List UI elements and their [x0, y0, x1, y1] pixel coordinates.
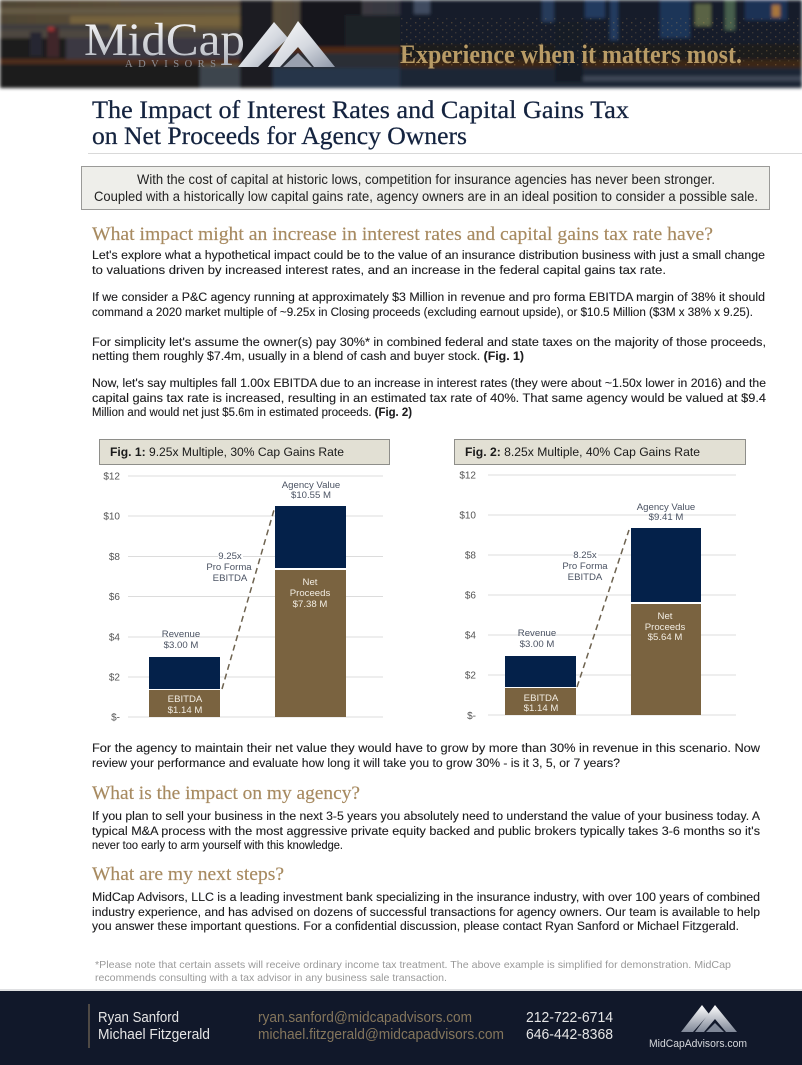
title: The Impact of Interest Rates and Capital Gains Tax [92, 97, 630, 124]
y axis labels: $8 [109, 552, 120, 563]
multiple label: 9.25x [218, 551, 242, 562]
figure 2 heading: Fig. 2: 8.25x Multiple, 40% Cap Gains Rate [465, 445, 700, 459]
logo: mountain mark [238, 21, 335, 67]
agency value bar: $9.41 M [649, 512, 683, 523]
footer [0, 989, 802, 1065]
y axis labels: $2 [465, 670, 476, 682]
figure 1 heading [100, 440, 390, 464]
paragraph: about MidCap: you answer these important questions. For a confidential discussion, please contact Ryan Sanford or Michael Fitzgerald. [92, 919, 739, 933]
agency value bar: $10.55 M [291, 490, 331, 501]
figure 2 heading [454, 440, 746, 464]
footer phones [526, 1010, 613, 1043]
paragraph: multiples fall: capital gains tax rate is increased, resulting in an estimated tax rate of 40%. That same agency would be valued at $9.4 [92, 391, 766, 405]
footnote: *Please note that certain assets will receive ordinary income tax treatment. The above example is simplified for demonstration. MidCap [95, 960, 731, 971]
footer logo mark [681, 1005, 737, 1032]
revenue bar: Revenue [518, 628, 556, 639]
y axis labels [103, 472, 120, 724]
y axis labels [459, 470, 476, 722]
footer emails: ryan.sanford@midcapadvisors.com [258, 1010, 472, 1026]
agency value bar: Proceeds [290, 588, 330, 599]
revenue bar: $3.00 M [164, 640, 198, 651]
paragraph: about MidCap: MidCap Advisors, LLC is a leading investment bank specializing in the insurance industry, with over 100 years of combined [92, 890, 760, 904]
title [92, 97, 630, 150]
paragraph: owner taxes [92, 335, 766, 363]
paragraph: hypothetical impact: to valuations driven by increased interest rates, and an increase in the federal capital gains tax rate. [92, 263, 666, 277]
y axis labels: $12 [103, 472, 120, 482]
heading: impact on my agency: What is the impact on my agency? [92, 783, 360, 804]
agency value bar: Net [303, 577, 318, 588]
agency value bar: Proceeds [645, 622, 685, 633]
multiple arrow [577, 530, 629, 687]
agency value bar: $5.64 M [648, 632, 682, 643]
paragraph: maintain net value: For the agency to maintain their net value they would have to grow by more than 30% in revenue in this scenario. Now [92, 741, 760, 755]
multiple label: EBITDA [213, 573, 248, 584]
paragraph: multiples fall [92, 376, 766, 419]
footer emails [258, 1010, 504, 1043]
footer emails: michael.fitzgerald@midcapadvisors.com [258, 1027, 504, 1043]
paragraph: about MidCap [92, 890, 760, 933]
panel: figure 2 chart [454, 440, 746, 722]
revenue bar: EBITDA [168, 694, 203, 705]
footer phones: 646-442-8368 [526, 1027, 613, 1043]
logo: MidCap Advisors: ADVISORS [125, 59, 216, 70]
revenue bar: $1.14 M [524, 703, 558, 714]
paragraph: maintain net value: review your performance and evaluate how long it will take you to grow 30% - is it 3, 5, or 7 years? [92, 756, 620, 770]
paragraph: multiples fall: Million and would net just $5.6m in estimated proceeds. (Fig. 2) [92, 405, 412, 419]
footnote: recommends consulting with a tax advisor in any business sale transaction. [95, 973, 447, 984]
revenue bar: EBITDA [524, 693, 559, 704]
agency value bar [275, 480, 346, 717]
agency value bar [631, 502, 701, 715]
city lights [400, 18, 802, 66]
paragraph: value today: If you plan to sell your business in the next 3-5 years you absolutely need to understand the value of your business today. A [92, 809, 761, 823]
agency value bar: Agency Value [282, 480, 340, 491]
footer website: MidCapAdvisors.com [649, 1038, 747, 1050]
paragraph: P&C agency example: If we consider a P&C agency running at approximately $3 Million in revenue and pro forma EBITDA margin of 38% it should [92, 290, 765, 304]
paragraph: about MidCap: industry experience, and has advised on dozens of successful transactions for agency owners. Our team is available to help [92, 905, 760, 919]
y axis labels: $12 [459, 470, 476, 482]
revenue bar [505, 628, 576, 715]
multiple label [206, 551, 252, 584]
y axis labels: $4 [465, 630, 476, 642]
paragraph: value today [92, 809, 761, 852]
multiple label: Pro Forma [206, 562, 252, 573]
paragraph: P&C agency example: command a 2020 market multiple of ~9.25x in Closing proceeds (excluding earnout upside), or $10.5 Million ($3M x 38% x 9.25). [92, 305, 753, 319]
y axis labels: $6 [109, 592, 120, 603]
paragraph: owner taxes: netting them roughly $7.4m, usually in a blend of cash and buyer stock. (Fig. 1) [92, 349, 524, 363]
title: on Net Proceeds for Agency Owners [92, 123, 467, 150]
panel: figure 1 chart [100, 440, 390, 724]
multiple arrow [222, 510, 274, 689]
revenue bar [149, 629, 220, 717]
footnote [95, 960, 731, 984]
multiple label: 8.25x [573, 550, 597, 561]
agency value bar: $7.38 M [293, 599, 327, 610]
y axis labels: $- [467, 711, 476, 722]
agency value bar: Net [658, 611, 673, 622]
footer phones: 212-722-6714 [526, 1010, 613, 1026]
paragraph: value today: never too early to arm yourself with this knowledge. [92, 838, 343, 852]
intro callout box: With the cost of capital at historic lows, competition for insurance agencies has never been stronger. [137, 172, 715, 187]
revenue bar: $1.14 M [168, 705, 202, 716]
paragraph: hypothetical impact [92, 248, 765, 277]
paragraph: owner taxes: For simplicity let's assume the owner(s) pay 30%* in combined federal and state taxes on the majority of those proceeds, [92, 335, 766, 349]
paragraph: value today: typical M&A process with the most aggressive private equity backed and public brokers typically takes 3-6 months so it's [92, 824, 760, 838]
banner skyline photo [0, 0, 802, 88]
y axis labels: $2 [109, 672, 120, 684]
y axis labels: $4 [109, 632, 120, 644]
multiple label [562, 550, 608, 583]
y axis labels: $6 [465, 590, 476, 602]
agency value bar: Agency Value [637, 502, 695, 513]
y axis labels: $10 [459, 510, 476, 522]
y axis labels: $8 [465, 550, 476, 562]
multiple label: EBITDA [568, 572, 603, 583]
paragraph: P&C agency example [92, 290, 765, 319]
y axis labels: $10 [103, 512, 120, 522]
footer names: Michael Fitzgerald [98, 1027, 210, 1043]
figure 1 heading: Fig. 1: 9.25x Multiple, 30% Cap Gains Rate [110, 445, 344, 459]
multiple label: Pro Forma [562, 561, 608, 572]
paragraph: hypothetical impact: Let's explore what a hypothetical impact could be to the value of an insurance distribution business with just a small change [92, 248, 765, 262]
revenue bar: Revenue [162, 629, 200, 640]
tagline: Experience when it matters most. [400, 40, 742, 69]
logo: MidCap Advisors: MidCap [84, 14, 245, 66]
footer names: Ryan Sanford [98, 1010, 179, 1026]
paragraph: maintain net value [92, 741, 760, 770]
header banner [0, 0, 802, 88]
heading: next steps: What are my next steps? [92, 864, 284, 885]
paragraph: multiples fall: Now, let's say multiples fall 1.00x EBITDA due to an increase in interest rates (they were about ~1.50x lower in 2016) and the [92, 376, 766, 390]
logo: MidCap Advisors [84, 14, 335, 70]
heading: what impact: What impact might an increase in interest rates and capital gains tax rate have? [92, 224, 713, 245]
revenue bar: $3.00 M [520, 639, 554, 650]
intro callout box [82, 166, 770, 210]
footer names [98, 1010, 210, 1043]
y axis labels: $- [111, 712, 120, 724]
intro callout box: Coupled with a historically low capital gains rate, agency owners are in an ideal position to consider a possible sale. [94, 189, 758, 204]
